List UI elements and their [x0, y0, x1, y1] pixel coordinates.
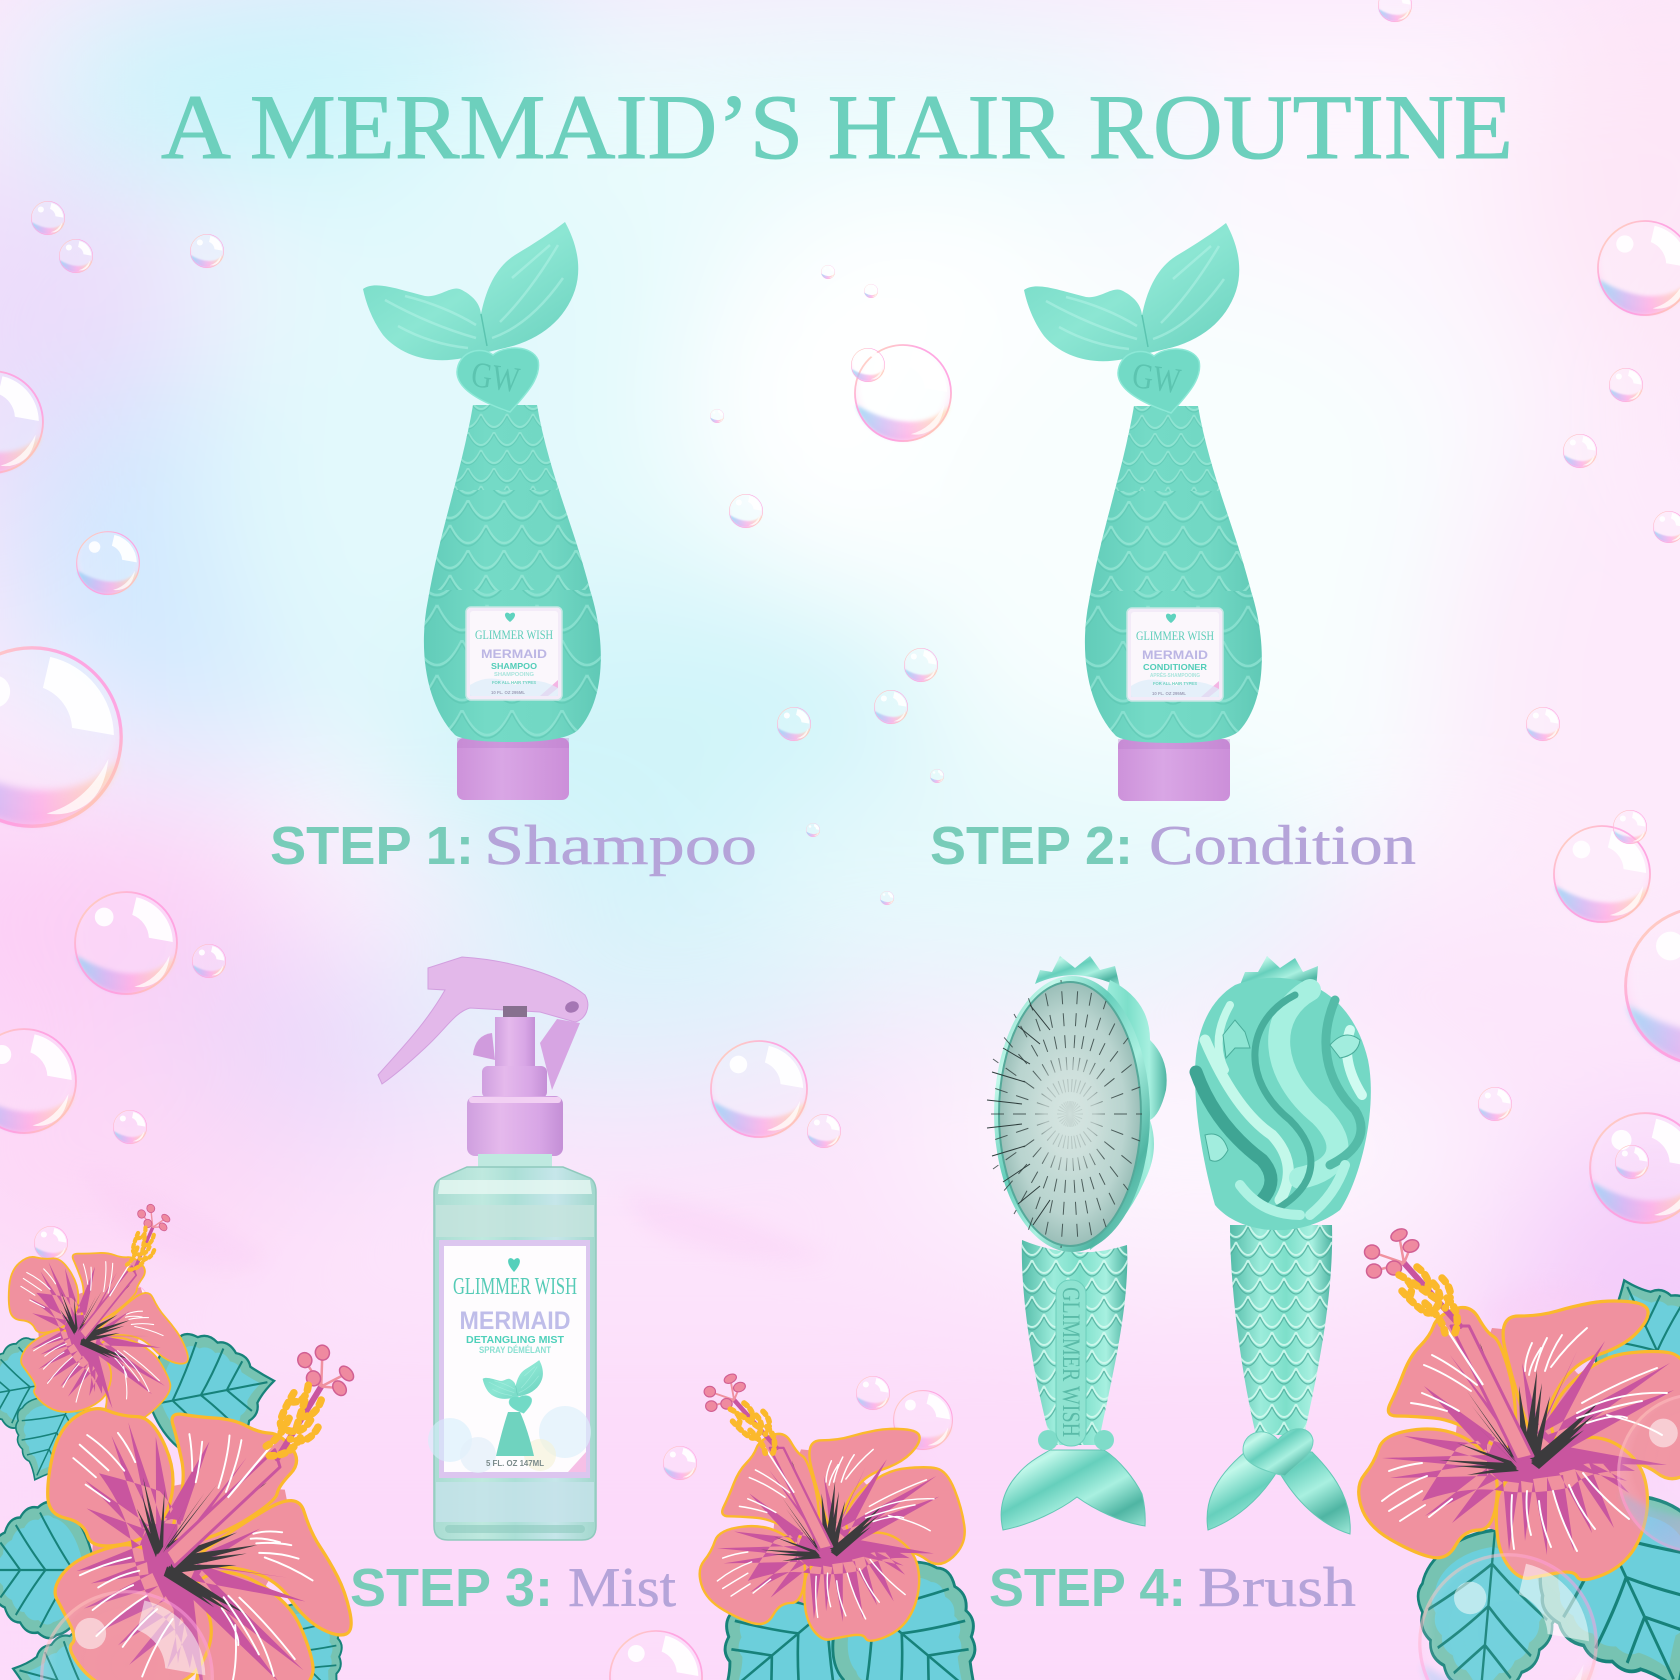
shampoo label text: SHAMPOO — [491, 661, 537, 671]
conditioner label text: GLIMMER WISH — [1136, 628, 1214, 643]
brush back with hair — [1195, 956, 1371, 1534]
step 2 caption: STEP 2: — [930, 816, 1133, 876]
shampoo label text: FOR ALL HAIR TYPES — [492, 680, 536, 685]
brush crown — [1035, 956, 1120, 987]
brush hair — [1195, 978, 1371, 1230]
step 3 caption: Mist — [568, 1557, 676, 1619]
step 2 caption — [930, 815, 1416, 877]
panel: step 2 condition — [930, 223, 1416, 877]
hibiscus: top left — [0, 1196, 243, 1456]
brush cushion — [999, 982, 1141, 1246]
panel: step 3 mist — [350, 957, 676, 1619]
spray label: MERMAID — [460, 1307, 570, 1335]
hibiscus: bottom right — [1359, 1226, 1680, 1580]
conditioner label text: MERMAID — [1142, 648, 1208, 662]
conditioner label text: APRÈS-SHAMPOOING — [1150, 671, 1200, 679]
spray label: 5 FL. OZ 147ML — [486, 1459, 544, 1468]
step 4 caption: Brush — [1198, 1557, 1356, 1619]
spray label — [428, 1240, 591, 1478]
bristles — [986, 980, 1142, 1248]
brush front handle: GLIMMER WISH — [1057, 1287, 1084, 1437]
conditioner bottle — [1024, 223, 1271, 801]
conditioner label text: FOR ALL HAIR TYPES — [1153, 681, 1197, 686]
shampoo label text: SHAMPOOING — [494, 672, 534, 678]
shampoo label text — [475, 627, 553, 695]
step 1 caption — [270, 815, 757, 877]
brush back tail fins — [1207, 1452, 1350, 1534]
label mini tail — [483, 1360, 543, 1456]
shampoo label text: GLIMMER WISH — [475, 627, 553, 642]
brush back bumps — [1080, 980, 1167, 1250]
step 3 caption: STEP 3: — [350, 1558, 553, 1618]
conditioner label text: 10 FL. OZ 295ML — [1152, 691, 1186, 696]
spray label: SPRAY DÉMÉLANT — [479, 1345, 551, 1355]
brush back crown — [1240, 956, 1318, 990]
conditioner label text: CONDITIONER — [1143, 662, 1207, 672]
shampoo bottle — [363, 222, 610, 800]
shampoo label text: MERMAID — [481, 647, 547, 661]
spray label: GLIMMER WISH — [453, 1274, 577, 1300]
title: A MERMAID’S HAIR ROUTINE — [161, 76, 1513, 178]
step 2 caption: Condition — [1149, 815, 1416, 877]
hibiscus: bottom left large — [5, 1332, 445, 1680]
brush front tail fins — [1001, 1450, 1145, 1530]
brush front with bristles — [986, 956, 1167, 1530]
leaves: bottom centre — [674, 1531, 1026, 1680]
spray bottle — [378, 957, 596, 1540]
leaves: bottom right — [1408, 1253, 1680, 1680]
spray trigger — [378, 957, 588, 1090]
brush back heart — [1243, 1429, 1313, 1476]
step 3 caption — [350, 1557, 676, 1619]
foreground bubbles — [40, 1393, 1680, 1680]
step 4 caption: STEP 4: — [989, 1558, 1186, 1618]
shampoo label text: 10 FL. OZ 295ML — [491, 690, 525, 695]
small front bubble — [118, 1285, 148, 1315]
brush front handle — [1022, 1240, 1128, 1450]
spray collar — [467, 1066, 563, 1156]
hibiscus: bottom centre — [700, 1372, 965, 1641]
panel: step 4 brush — [986, 956, 1371, 1619]
step 4 caption — [989, 1557, 1356, 1619]
leaves: bottom left — [0, 1319, 376, 1680]
spray glass — [434, 1154, 596, 1540]
conditioner label text — [1136, 628, 1214, 696]
step 1 caption: STEP 1: — [270, 816, 474, 876]
panel: step 1 shampoo — [270, 222, 757, 877]
spray label: DETANGLING MIST — [466, 1335, 564, 1346]
step 1 caption: Shampoo — [484, 815, 757, 877]
brush back handle — [1228, 1222, 1334, 1437]
